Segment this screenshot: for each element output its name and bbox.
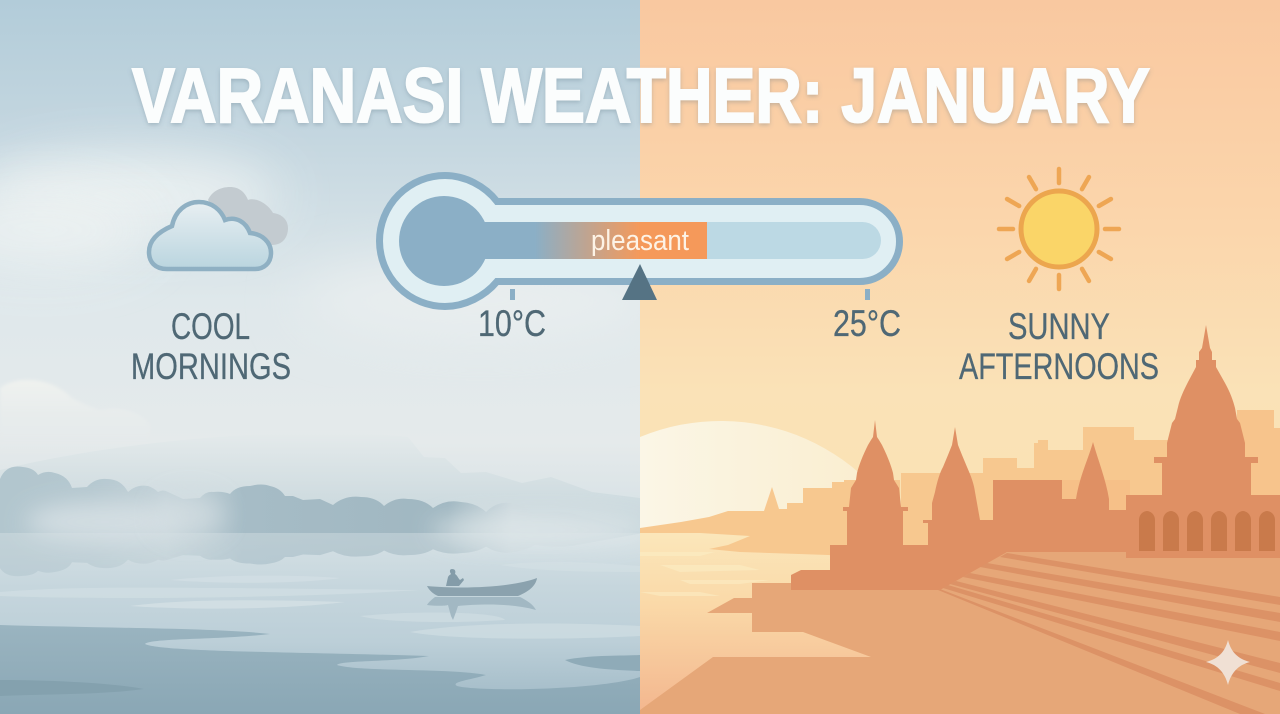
tree line xyxy=(0,466,499,533)
panel: cool morning side xyxy=(0,0,660,714)
empty tube xyxy=(470,222,881,259)
label: cool mornings xyxy=(131,306,291,387)
sparkle mark xyxy=(1206,640,1250,685)
filled bar xyxy=(470,222,707,259)
sun rays xyxy=(999,169,1119,289)
thermometer casing xyxy=(380,176,900,306)
deep water bands xyxy=(0,625,640,714)
tree reflection xyxy=(0,533,640,576)
temples and ghat architecture silhouette xyxy=(791,325,1280,590)
rower xyxy=(446,569,464,586)
label: 25°C: 25°C xyxy=(833,303,901,344)
misty mountains xyxy=(0,474,640,532)
boat with rower xyxy=(427,569,537,620)
pointer xyxy=(622,264,657,300)
sun disc xyxy=(1021,191,1097,267)
river water xyxy=(640,533,830,710)
soft background clouds xyxy=(0,136,606,398)
label: sunny afternoons: SUNNY xyxy=(1008,306,1110,347)
label: sunny afternoons xyxy=(959,306,1159,387)
distant ghat skyline xyxy=(640,480,900,560)
label: pleasant: pleasant xyxy=(591,225,689,257)
thermometer xyxy=(380,176,900,306)
pale setting sun disc xyxy=(640,421,858,528)
panel: sunny afternoon side xyxy=(640,0,1280,714)
icon: sun xyxy=(999,169,1119,289)
ghat ground xyxy=(640,552,1280,714)
ghat steps xyxy=(938,553,1280,714)
boat hull xyxy=(427,578,537,596)
label: cool mornings: COOL xyxy=(171,306,250,347)
water surface xyxy=(0,584,640,690)
label: 10°C: 10°C xyxy=(478,303,546,344)
fog banks xyxy=(25,493,650,546)
rear city buildings xyxy=(901,410,1280,545)
label: cool mornings: MORNINGS xyxy=(131,346,291,387)
water light streaks xyxy=(0,581,640,638)
boat reflection xyxy=(427,597,536,620)
bulb xyxy=(399,196,489,286)
tick 10 xyxy=(510,289,515,300)
back cloud xyxy=(208,187,288,245)
tick 25 xyxy=(865,289,870,300)
front cloud xyxy=(149,202,271,269)
icon: cloud xyxy=(149,187,288,269)
label: sunny afternoons: AFTERNOONS xyxy=(959,346,1159,387)
temple arcade arches xyxy=(1139,511,1275,551)
